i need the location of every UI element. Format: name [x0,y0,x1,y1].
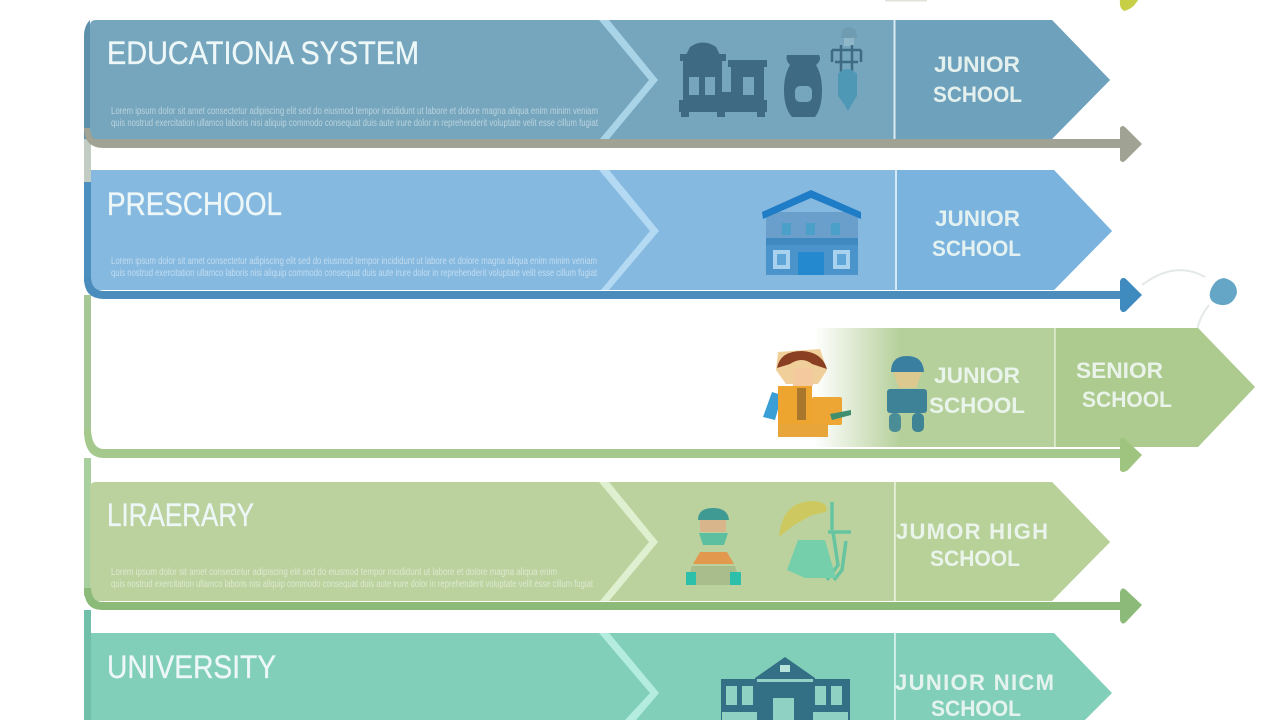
divider [894,20,896,139]
description text [111,567,593,590]
label: junior high school: JUNIOR NICM [895,670,1054,695]
label: senior school: SENIOR [1076,358,1163,383]
label: junior school: JUNIOR [934,52,1020,77]
arrow [84,126,1142,162]
panel: university [84,610,1112,720]
label: junior school [929,363,1025,418]
icon: university building [721,657,850,720]
icon: child on chair [779,501,851,580]
description text: quis nostrud exercitation ullamco laboris nisi aliquip commodo consequat duis aute irure dolor in reprehenderit voluptate velit esse cillum fugiat [111,579,593,590]
heading: LIRAERARY [107,497,254,533]
description text: Lorem ipsum dolor sit amet consectetur adipiscing elit sed do eiusmod tempor incididunt ut labore et dolore magna aliqua enim [111,567,557,578]
panel: educational system [84,20,1142,182]
description text [111,256,597,279]
divider [894,633,896,720]
description text [111,106,598,129]
label: junior school: SCHOOL [932,236,1021,261]
description text: Lorem ipsum dolor sit amet consectetur adipiscing elit sed do eiusmod tempor incididunt ut labore et dolore magna aliqua enim minim veniam [111,256,597,267]
chevron [599,482,658,601]
icon: decorative connector with blob [1142,270,1237,330]
label: junior school: SCHOOL [933,82,1022,107]
heading: UNIVERSITY [107,649,276,685]
label: junior high school [895,670,1054,720]
label: junior high school: SCHOOL [930,546,1020,571]
panel: preschool [84,170,1142,312]
top edge fragments [885,0,1138,11]
panel: primary [84,458,1142,624]
icon: child figure [686,508,741,585]
heading: PRESCHOOL [107,186,282,222]
arrow [84,278,1142,312]
divider [894,482,896,601]
description text: Lorem ipsum dolor sit amet consectetur adipiscing elit sed do eiusmod tempor incididunt ut labore et dolore magna aliqua enim minim veniam [111,106,598,117]
arrow [84,430,1142,472]
icon: vase [784,55,822,117]
icon: buildings [679,42,767,117]
label: junior school [933,52,1022,107]
label: senior school: SCHOOL [1082,387,1172,412]
icon: student with books [763,349,851,437]
label: junior school: JUNIOR [934,363,1020,388]
icon: house [762,190,861,275]
label: senior school [1076,358,1172,412]
chevron [599,20,658,139]
label: junior school: SCHOOL [929,393,1025,418]
label: junior school: JUNIOR [935,206,1020,231]
icon: student at laptop [887,356,927,432]
label: junior school [932,206,1021,261]
description text: quis nostrud exercitation ullamco laboris nisi aliquip commodo consequat duis aute irure dolor in reprehenderit voluptate velit esse cillum fugiat [111,268,597,279]
heading: EDUCATIONA SYSTEM [107,35,419,71]
divider [1054,328,1056,447]
description text: quis nostrud exercitation ullamco laboris nisi aliquip commodo consequat duis aute irure dolor in reprehenderit voluptate velit esse cillum fugiat [111,118,598,129]
chevron [599,170,659,290]
chevron [599,633,659,720]
arrow [84,588,1142,624]
panel: junior and senior school [84,295,1255,472]
label: junior high school: JUMOR HIGH [896,519,1048,544]
label: junior high school [896,519,1048,571]
icon: lantern [832,27,861,111]
divider [895,170,897,290]
